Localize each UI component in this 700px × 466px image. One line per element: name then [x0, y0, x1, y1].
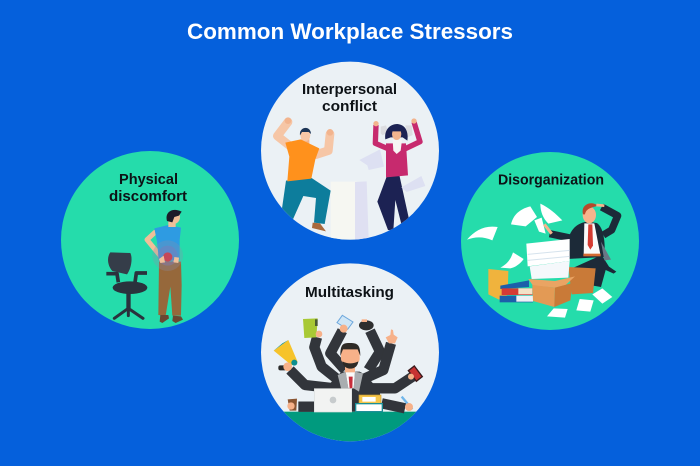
- paper stack: [331, 181, 369, 240]
- torso and head: [325, 343, 380, 412]
- flying papers: [467, 204, 612, 318]
- label: [302, 82, 397, 115]
- back box: [568, 267, 596, 294]
- infographic: [61, 23, 639, 442]
- pen and hand: [402, 397, 413, 411]
- office chair: [106, 252, 147, 318]
- man holding lower back: [147, 210, 183, 323]
- panel: interpersonal conflict: [261, 62, 439, 240]
- label: conflict: [322, 99, 377, 115]
- desk: [284, 412, 416, 442]
- label: [109, 172, 187, 205]
- man in suit: [544, 203, 618, 287]
- label: Physical: [119, 172, 178, 188]
- man in orange shirt: [277, 117, 333, 231]
- label: Interpersonal: [302, 82, 397, 98]
- label: Multitasking: [305, 285, 394, 301]
- panel: physical discomfort: [61, 151, 239, 329]
- folders: [356, 395, 382, 412]
- panel: multitasking: [255, 263, 445, 445]
- title: Common Workplace Stressors: [187, 19, 513, 44]
- label: discomfort: [109, 189, 187, 205]
- pointing hand: [386, 329, 398, 343]
- label: Disorganization: [498, 172, 604, 188]
- coffee grinder object: [359, 319, 374, 330]
- woman in magenta jacket: [373, 118, 420, 231]
- panel: disorganization: [461, 152, 639, 330]
- binders: [500, 280, 533, 302]
- cardboard box: [528, 276, 575, 307]
- flying paper: [401, 176, 425, 192]
- phone: [408, 366, 422, 381]
- green notebook: [303, 318, 322, 338]
- megaphone: [274, 340, 298, 371]
- suit arms: [290, 331, 415, 408]
- paper stack: [526, 239, 570, 279]
- yellow folder: [488, 269, 508, 300]
- pain glow: [152, 240, 183, 271]
- laptop: [314, 389, 352, 412]
- flying paper: [359, 149, 384, 170]
- coffee cup: [287, 399, 297, 411]
- calculator: [337, 315, 353, 333]
